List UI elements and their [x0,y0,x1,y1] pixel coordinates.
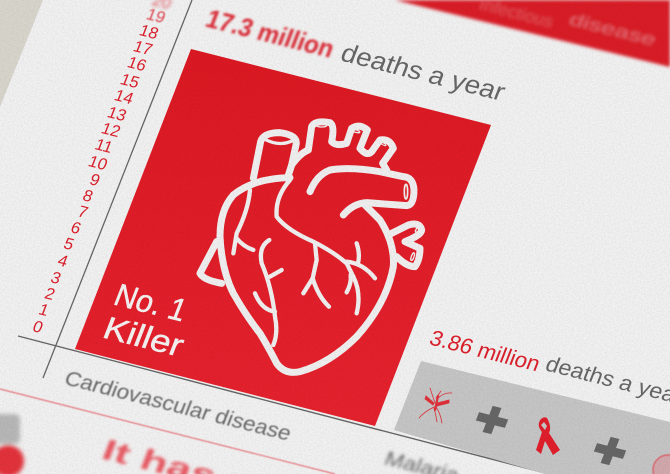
heading: 3.86 million deaths a year [426,325,670,409]
heading: 17.3 million deaths a year [202,4,510,107]
red divider line [0,389,335,474]
icon: AIDS ribbon [536,417,560,455]
panel: grey causes strip [394,361,670,474]
heading: 17.3 million deaths a year: deaths a year [337,38,510,107]
label: No. 1 Killer [98,277,192,363]
y axis numbers: 0 [30,318,45,337]
top red banner: disease [567,10,659,49]
y axis numbers: 1 [36,301,51,320]
y axis numbers: 16 [125,54,149,75]
y axis numbers: 5 [61,235,76,254]
y axis numbers: 7 [75,203,90,222]
y axis numbers: 11 [92,136,115,157]
top red banner [395,0,670,67]
icon: virus [653,455,670,474]
y axis numbers: 8 [80,187,95,206]
label: No. 1 Killer: Killer [98,310,189,363]
y axis numbers: 9 [87,171,102,190]
y axis numbers: 2 [42,285,57,304]
y axis numbers: 15 [118,71,142,92]
y axis numbers: 3 [48,269,63,288]
icon: grey and red blurred bottom-left figure [0,414,24,474]
y axis numbers: 10 [86,153,110,174]
y axis numbers: 6 [68,219,83,238]
icon: plus [590,434,630,468]
y axis numbers [30,0,174,337]
y axis numbers: 17 [131,38,155,59]
icon: anatomical heart [200,122,422,372]
x axis [18,336,549,474]
label: No. 1 Killer: No. 1 [109,277,192,328]
y axis [43,0,192,378]
y axis numbers: 19 [144,6,168,27]
heading: 3.86 million deaths a year: 3.86 million [426,325,544,376]
y axis numbers: 12 [99,120,123,141]
icon: plus [472,403,512,437]
label: Cardiovascular disease: Cardiovascular disease [61,367,295,446]
y axis numbers: 4 [55,252,70,271]
icon: mosquito [419,388,452,423]
heading: 17.3 million deaths a year: 17.3 million [202,4,339,63]
y axis numbers: 18 [137,22,161,43]
y axis numbers: 14 [112,87,136,108]
y axis numbers: 13 [105,104,129,125]
panel: red heart card [75,49,491,426]
